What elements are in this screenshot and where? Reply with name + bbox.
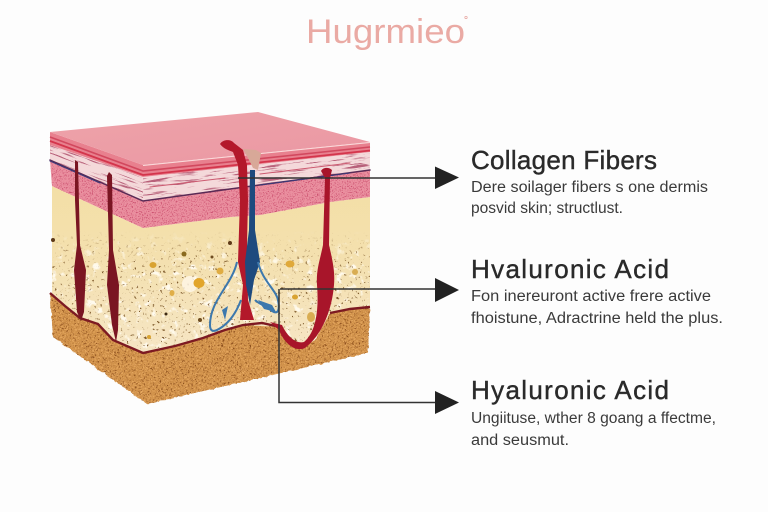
text block: collagen fibers: posvid skin; structlust.: [471, 200, 623, 217]
layer: collagen fibre strokes: [50, 160, 370, 201]
text block: collagen fibers: [471, 145, 708, 217]
hair follicle: blue stem: [245, 170, 260, 305]
skin cross-section block: [45, 112, 375, 410]
layer: cream fat tissue: [45, 185, 375, 360]
vessel: left: [74, 160, 86, 321]
layer: pink dermis: [50, 162, 370, 228]
text block: collagen fibers: Collagen Fibers: [471, 145, 657, 175]
hair follicle: blue loops: [210, 262, 279, 331]
layer: red epidermis stripes: [50, 132, 370, 177]
vessel: right with U-shaped loop: [270, 168, 334, 349]
layer: subcutaneous sponge: [50, 294, 370, 404]
text block: hyaluronic acid: and seusmut.: [471, 432, 569, 449]
layer: top surface: [50, 112, 370, 165]
text block: hvaluronic acid: Fon inereuront active frere active: [471, 288, 711, 305]
dark vessel boundary along sponge: [50, 293, 370, 353]
vessel: second left: [107, 172, 119, 342]
infographic canvas: [49, 16, 722, 445]
arrow: to first hyaluronic acid: [280, 278, 459, 302]
arrow: to collagen fibers: [238, 166, 459, 189]
text block: hyaluronic acid: Hyaluronic Acid: [471, 375, 669, 405]
arrow: to second hyaluronic acid: [279, 289, 459, 414]
text block: hyaluronic acid: Ungiituse, wther 8 goang a ffectme,: [471, 410, 716, 427]
text block: hyaluronic acid: [471, 375, 716, 449]
layer: white fibrous band: [50, 145, 370, 200]
hair follicle: flap of skin: [243, 149, 261, 170]
title: Hugrmieo: [306, 13, 465, 51]
text block: hvaluronic acid: Hvaluronic Acid: [471, 254, 669, 284]
hair follicle: red cap and stem: [220, 140, 254, 320]
text block: collagen fibers: Dere soilager fibers s one dermis: [471, 179, 708, 196]
text block: hvaluronic acid: fhoistune, Adractrine held the plus.: [471, 310, 723, 327]
layer: cream fat granules: [51, 238, 358, 339]
text block: hvaluronic acid: [471, 254, 723, 327]
